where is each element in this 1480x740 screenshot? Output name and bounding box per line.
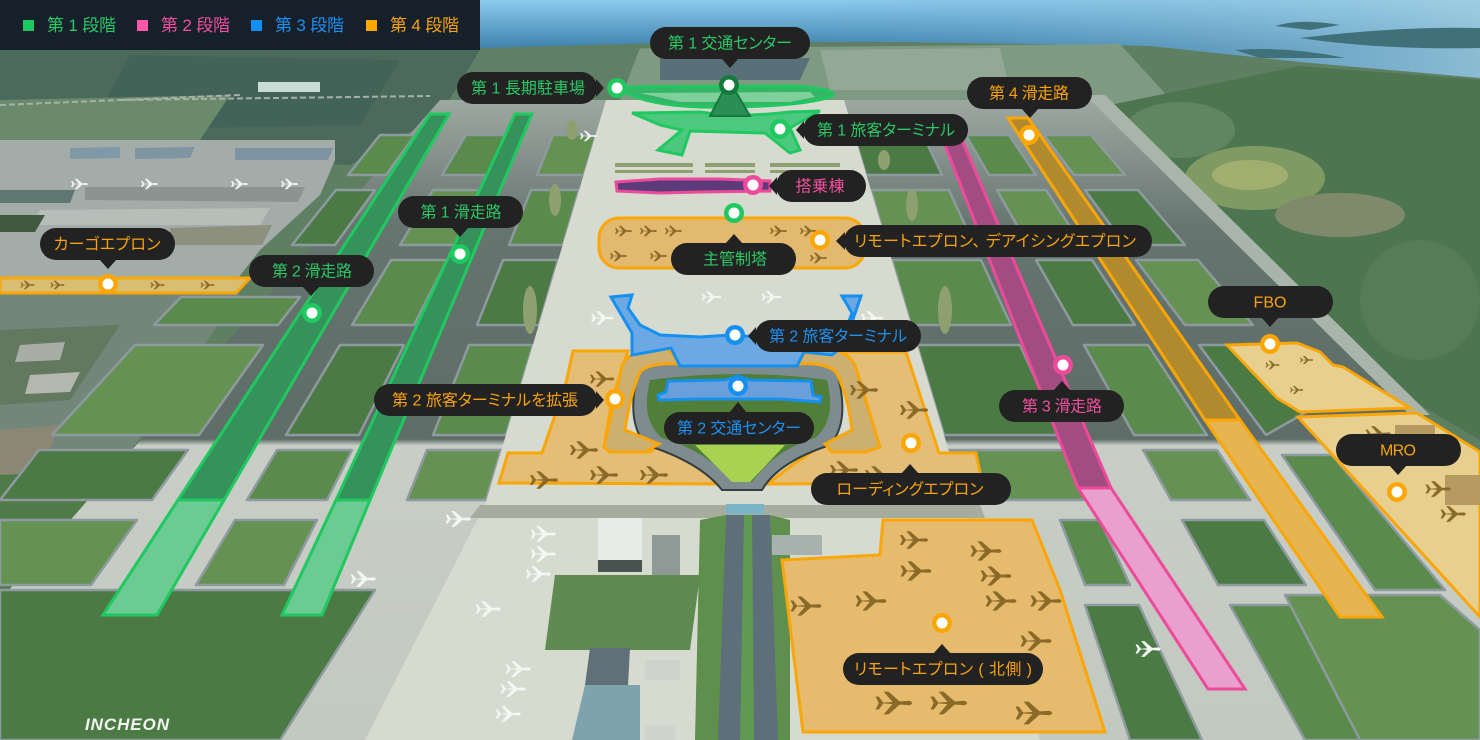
phase 4 runway 4 overlay bbox=[1008, 118, 1382, 617]
callout: runway 3: 第 3 滑走路 bbox=[1022, 398, 1102, 416]
callout: long-term parking 1: 第 1 長期駐車場 bbox=[471, 80, 585, 98]
callout: runway 4 bbox=[967, 77, 1092, 118]
marker: runway 1 bbox=[450, 244, 470, 264]
right mountain bbox=[1110, 66, 1480, 440]
marker: FBO bbox=[1260, 334, 1280, 354]
legend phase 4: 第 4 段階 bbox=[390, 16, 459, 35]
callout: boarding concourse: 搭乗棟 bbox=[796, 178, 844, 196]
callout: loading apron: ローディングエプロン bbox=[836, 480, 984, 498]
FBO apron bbox=[1227, 343, 1410, 412]
callout: terminal 1: 第 1 旅客ターミナル bbox=[817, 122, 955, 140]
marker: MRO bbox=[1387, 482, 1407, 502]
callout: long-term parking 1 bbox=[457, 72, 604, 104]
callout: MRO bbox=[1336, 434, 1461, 475]
marker: terminal 2 bbox=[725, 325, 745, 345]
callout: transport center 1 bbox=[650, 27, 810, 68]
callout: runway 4: 第 4 滑走路 bbox=[989, 84, 1069, 102]
callout: FBO bbox=[1208, 286, 1333, 327]
callout: MRO: MRO bbox=[1380, 442, 1416, 460]
marker: north remote apron bbox=[932, 613, 952, 633]
marker: terminal 2 expansion bbox=[605, 389, 625, 409]
white aircraft around terminals bbox=[71, 131, 1161, 722]
callout: north remote apron: リモートエプロン ( 北側 ) bbox=[854, 660, 1032, 678]
callout: terminal 2 bbox=[748, 320, 921, 352]
callout: control tower bbox=[671, 234, 796, 275]
marker: runway 3 bbox=[1053, 355, 1073, 375]
lower-left service area bbox=[0, 293, 240, 590]
marker: remote and de-icing apron bbox=[810, 230, 830, 250]
legend phase 3: 第 3 段階 bbox=[275, 16, 344, 35]
callout: terminal 2 expansion bbox=[374, 384, 604, 416]
north remote apron bbox=[782, 520, 1105, 732]
southern strip with buildings bbox=[470, 504, 985, 740]
callout: boarding concourse bbox=[769, 170, 866, 202]
callout: loading apron bbox=[811, 464, 1011, 505]
marker: concourse bbox=[743, 175, 763, 195]
left hillside bbox=[0, 50, 480, 165]
callout: runway 1: 第 1 滑走路 bbox=[420, 204, 502, 222]
callout: runway 3 bbox=[999, 381, 1124, 422]
callout: remote and de-icing apron: リモートエプロン、 デアイシングエプロン bbox=[854, 232, 1136, 250]
callout: terminal 2: 第 2 旅客ターミナル bbox=[769, 328, 907, 346]
callout: transport center 2 bbox=[664, 402, 814, 444]
cargo apron overlay bbox=[0, 278, 250, 293]
second terminal building bbox=[611, 295, 861, 366]
second terminal central road loop bbox=[633, 361, 842, 490]
callout: runway 2 bbox=[249, 255, 374, 296]
legend phase 1: 第 1 段階 bbox=[47, 16, 116, 35]
marker: transport center 2 bbox=[728, 376, 748, 396]
second terminal expansion right bbox=[768, 352, 982, 484]
marker: loading apron bbox=[901, 433, 921, 453]
callout: terminal 2 expansion: 第 2 旅客ターミナルを拡張 bbox=[392, 392, 578, 410]
second terminal expansion left bbox=[499, 351, 723, 484]
legend bar bbox=[0, 0, 480, 50]
inner apron grass strips bbox=[523, 120, 952, 334]
marker: transport center 1 bbox=[719, 75, 739, 95]
callout: cargo apron bbox=[40, 228, 175, 269]
marker: long-term parking 1 bbox=[607, 78, 627, 98]
callout: cargo apron: カーゴエプロン bbox=[54, 234, 160, 254]
map watermark INCHEON: INCHEON bbox=[85, 715, 170, 734]
callout: remote and de-icing apron bbox=[836, 225, 1152, 257]
callout: transport center 2: 第 2 交通センター bbox=[677, 420, 801, 438]
central park bbox=[647, 374, 830, 482]
callout: transport center 1: 第 1 交通センター bbox=[668, 34, 792, 52]
legend phase 2: 第 2 段階 bbox=[161, 16, 230, 35]
phase 1 runway 2 overlay bbox=[103, 114, 449, 615]
callout: control tower: 主管制塔 bbox=[703, 250, 767, 268]
marker: terminal 1 bbox=[770, 119, 790, 139]
perimeter road bbox=[1085, 95, 1430, 415]
marker: runway 4 bbox=[1019, 125, 1039, 145]
callout: north remote apron bbox=[843, 644, 1043, 685]
phase 2 runway 3 overlay bbox=[945, 140, 1245, 689]
main control tower base bbox=[730, 222, 736, 244]
callout: terminal 1 bbox=[796, 114, 968, 146]
marker: runway 2 bbox=[302, 303, 322, 323]
callout: runway 2: 第 2 滑走路 bbox=[272, 262, 352, 280]
callout: FBO: FBO bbox=[1254, 294, 1286, 312]
first terminal and parking bbox=[617, 80, 833, 155]
boarding concourse bbox=[616, 179, 770, 193]
aircraft on aprons bbox=[20, 226, 1466, 724]
central apron bbox=[365, 100, 1040, 740]
MRO apron bbox=[1298, 413, 1480, 617]
horizon area behind terminal 1 bbox=[440, 44, 1180, 115]
marker: control tower bbox=[724, 203, 744, 223]
marker: cargo apron bbox=[98, 274, 118, 294]
cargo area bbox=[0, 140, 335, 278]
phase 1 runway 1 overlay bbox=[282, 114, 532, 615]
remote and de-icing apron bbox=[599, 218, 865, 268]
second transport center building bbox=[658, 376, 821, 402]
expansion concourse rings bbox=[604, 349, 880, 452]
callout: runway 1 bbox=[398, 196, 523, 237]
sea and sky background bbox=[0, 0, 1480, 80]
